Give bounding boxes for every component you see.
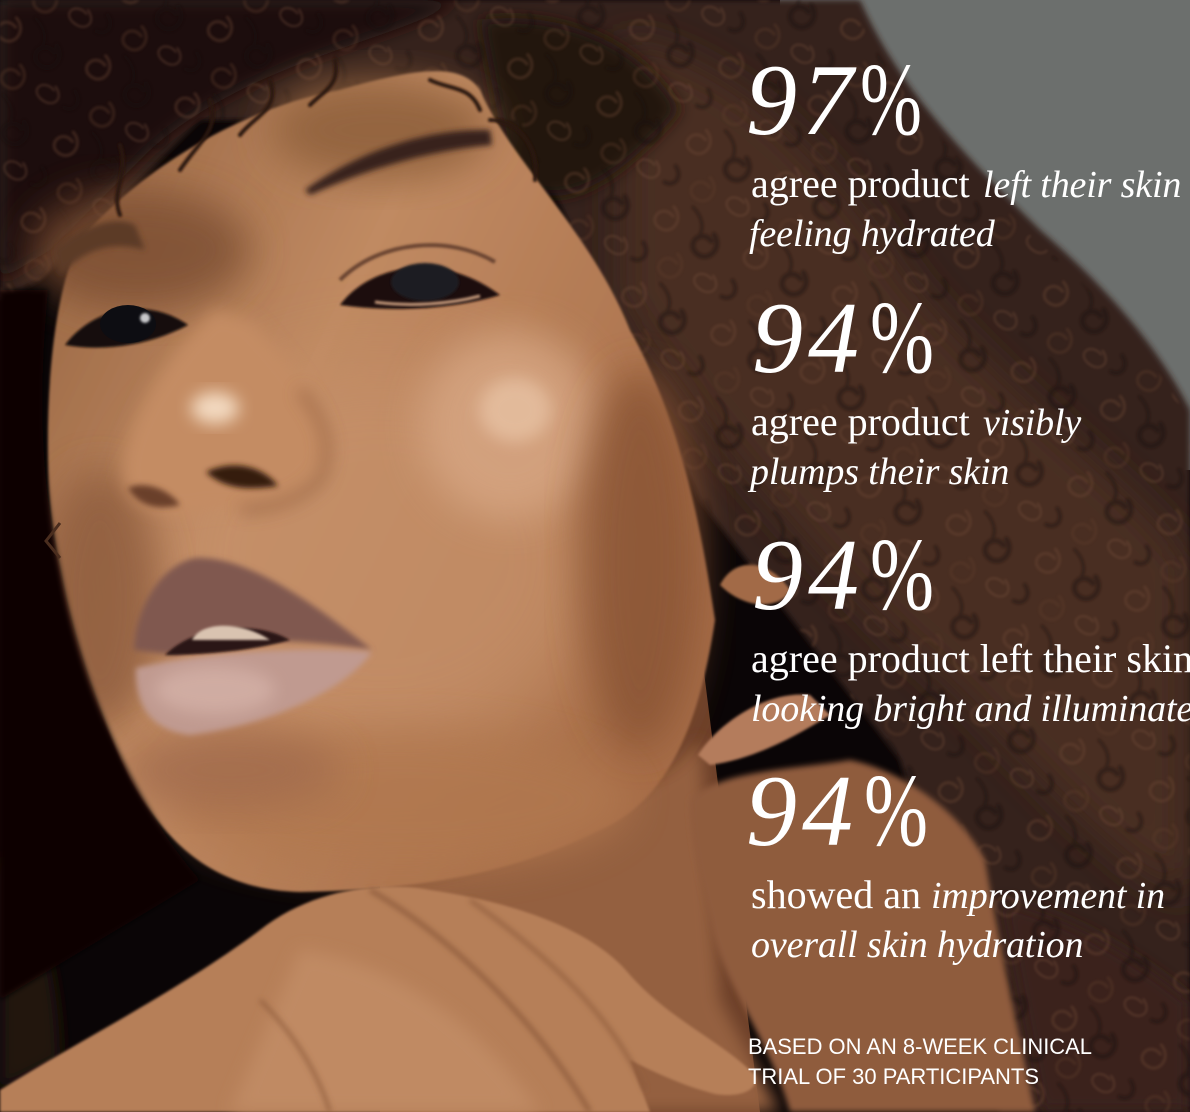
face <box>48 71 715 892</box>
footnote: BASED ON AN 8-WEEK CLINICAL <box>748 1034 1092 1059</box>
stat 2 number <box>752 280 934 395</box>
right brow <box>305 130 492 195</box>
stat 4 description: improvement in <box>931 875 1165 917</box>
stat 2 description: agree product <box>751 399 980 444</box>
face shading <box>30 80 700 870</box>
stat 1 number: 97 <box>746 44 858 157</box>
stat 3 number: 94 <box>752 519 864 632</box>
raised fingers <box>698 694 830 765</box>
chin hand <box>0 886 756 1112</box>
stat 2: 94% <box>747 280 1081 493</box>
stat 1: 97% <box>746 42 1181 255</box>
footnote: TRIAL OF 30 PARTICIPANTS <box>748 1064 1039 1089</box>
left eye <box>65 305 188 348</box>
stat 1 number <box>746 42 922 157</box>
stat 3: 94% <box>751 517 1190 730</box>
stat 4 number <box>746 753 928 868</box>
stat 2 number: 94 <box>752 282 864 395</box>
stat 1 number: % <box>860 42 922 157</box>
stat 3 number <box>752 517 934 632</box>
stat 1 description: feeling hydrated <box>749 213 996 255</box>
neck hand <box>690 760 1035 1112</box>
hand shading <box>230 890 645 1112</box>
stat 3 description: agree product left their skin <box>751 636 1190 681</box>
forehead hair wisps <box>117 60 536 215</box>
faint chevron <box>46 523 60 558</box>
stat 2 description: visibly <box>983 402 1081 444</box>
stat 4 description: overall skin hydration <box>751 924 1083 966</box>
stat 2 description: plumps their skin <box>747 451 1009 493</box>
stat 2 number: % <box>870 280 934 395</box>
neck <box>400 740 780 1112</box>
stat 4 number: % <box>864 753 928 868</box>
stat 1 description: left their skin <box>983 164 1181 206</box>
footnote <box>748 1034 1092 1089</box>
lips <box>134 558 372 735</box>
stat 4 description: showed an <box>751 872 931 917</box>
nose <box>122 310 328 513</box>
left brow <box>55 221 145 275</box>
stat 4 number: 94 <box>746 755 858 868</box>
stat 4: 94% <box>746 753 1165 966</box>
stat 1 description: agree product <box>751 161 980 206</box>
stat 3 number: % <box>870 517 934 632</box>
right eye <box>340 245 500 309</box>
left hair shadow over temple <box>0 290 200 1000</box>
neck shadow <box>380 640 760 1112</box>
ear <box>720 565 790 604</box>
background: grey wall top right <box>780 0 1190 470</box>
